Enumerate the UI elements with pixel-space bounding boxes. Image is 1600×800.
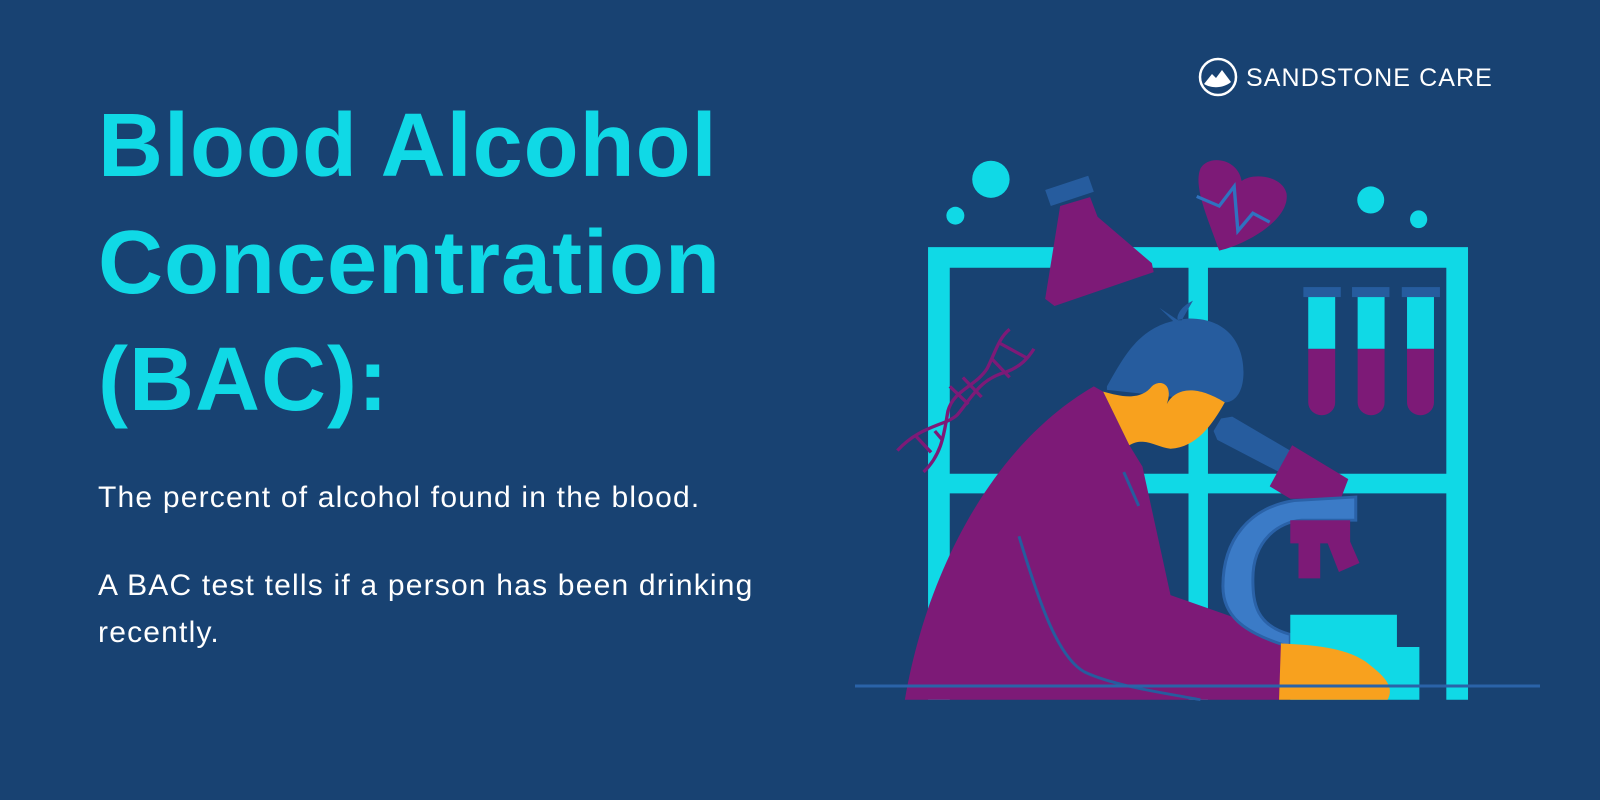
shelf frame [928, 247, 1468, 700]
DNA [897, 329, 1034, 472]
title [98, 96, 721, 430]
test tubes [1303, 287, 1440, 415]
microscope [1214, 417, 1419, 700]
text: BAC test [98, 569, 754, 649]
logo [1198, 58, 1493, 96]
text: BAC test: recently. [98, 616, 220, 649]
title: Blood Alcohol [98, 96, 718, 196]
heart [1197, 160, 1287, 251]
scientist body [905, 386, 1283, 700]
flask [1045, 176, 1154, 306]
title: (BAC): [98, 330, 389, 430]
text: definition: The percent of alcohol found in the blood. [98, 481, 700, 514]
floor line [855, 684, 1540, 688]
logo: SANDSTONE CARE [1246, 64, 1493, 92]
bubbles [946, 161, 1427, 228]
title: Concentration [98, 213, 721, 313]
scientist head [1103, 301, 1244, 449]
text: BAC test: A BAC test tells if a person has been drinking [98, 569, 754, 602]
hand [1279, 643, 1390, 700]
